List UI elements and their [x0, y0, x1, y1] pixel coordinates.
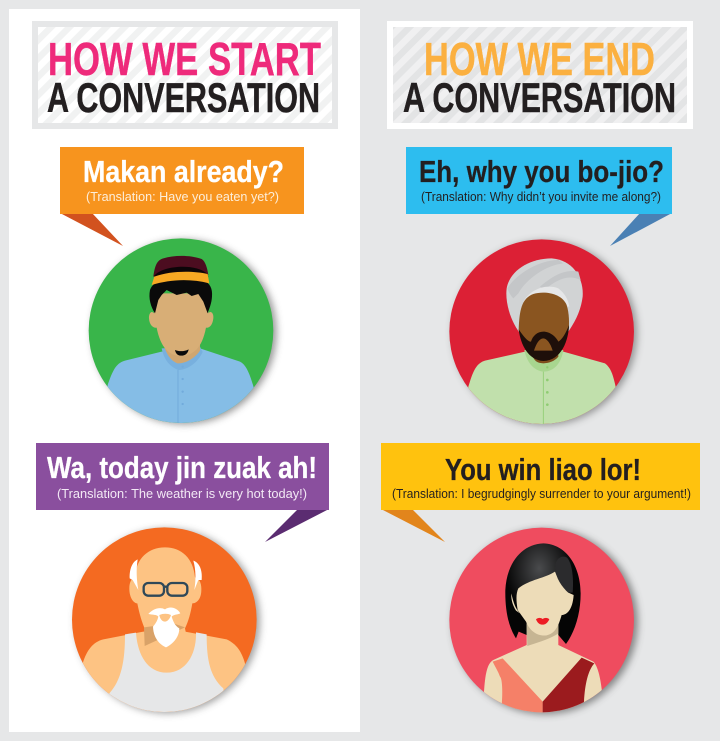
portrait: man in songkok: [89, 238, 277, 430]
portrait: man in turban: [449, 239, 637, 430]
panel: how we start: [9, 9, 360, 732]
speech bubble: today jin zuak: Wa, today jin zuak ah!: [47, 450, 317, 485]
portrait: woman with black hair: [449, 528, 638, 720]
title: how we end a conversation: [390, 24, 690, 126]
speech bubble: why you bo-jio: Eh, why you bo-jio?: [419, 154, 664, 189]
speech bubble: makan already: (Translation: Have you eaten yet?): [86, 189, 279, 204]
speech bubble: makan already: [60, 147, 304, 246]
portrait: old man with glasses: [72, 527, 260, 720]
speech bubble: today jin zuak: [36, 443, 329, 542]
speech bubble: you win liao lor: You win liao lor!: [445, 452, 641, 487]
speech bubble: why you bo-jio: (Translation: Why didn’t you invite me along?): [421, 189, 661, 204]
title: how we start a conversation: HOW WE START: [48, 33, 321, 85]
speech bubble: you win liao lor: [381, 443, 700, 542]
speech bubble: makan already: Makan already?: [83, 154, 284, 189]
speech bubble: today jin zuak: (Translation: The weather is very hot today!): [57, 486, 307, 501]
title: how we start a conversation: [35, 24, 335, 126]
title: how we start a conversation: A CONVERSATION: [47, 74, 320, 121]
speech bubble: why you bo-jio: [406, 147, 672, 246]
speech bubble: you win liao lor: (Translation: I begrudgingly surrender to your argument!): [392, 486, 691, 501]
